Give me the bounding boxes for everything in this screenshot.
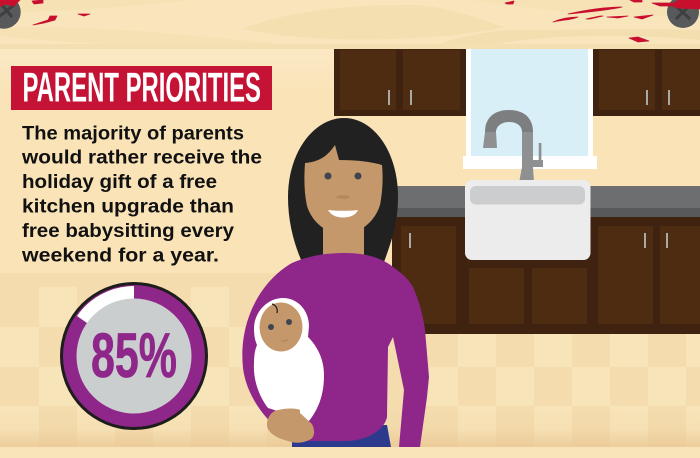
baby face: [260, 302, 302, 352]
woman: [242, 118, 429, 447]
upper left cabinet: [334, 49, 466, 116]
blanket: [254, 298, 324, 421]
countertop: [392, 186, 700, 217]
face: [304, 145, 383, 234]
upper right cabinet: [593, 49, 700, 116]
body text: weekend for a year.: [21, 244, 219, 266]
lower cabinets: [392, 217, 700, 334]
wall: [0, 49, 700, 279]
window: [463, 49, 597, 169]
body text: kitchen upgrade than: [22, 196, 234, 218]
eyes: [324, 172, 332, 180]
progress ring 85%: [60, 282, 208, 430]
sweater: [242, 253, 429, 447]
hair: [288, 118, 398, 262]
title banner: PARENT PRIORITIES: [22, 64, 261, 110]
body text: would rather receive the: [21, 147, 262, 169]
smile: [328, 210, 358, 218]
title banner: [11, 64, 272, 110]
baby: [254, 298, 324, 443]
floor checker tiles: [0, 273, 700, 447]
progress ring 85%: 85%: [91, 321, 177, 391]
left screw: [0, 0, 21, 29]
body text: free babysitting every: [22, 220, 234, 242]
neck: [323, 215, 364, 260]
faucet: [483, 110, 543, 183]
baby mouth: [279, 339, 289, 342]
body text: holiday gift of a free: [22, 171, 217, 193]
sink: [465, 180, 590, 260]
baby eyes: [268, 324, 274, 330]
bottom counter strip: [0, 447, 700, 458]
body text: The majority of parents: [22, 122, 244, 144]
right screw: [667, 0, 699, 28]
jeans: [292, 425, 391, 447]
red ribbon scraps: [0, 0, 700, 42]
wooden table top band: [0, 0, 700, 49]
hand: [267, 408, 314, 443]
baby hair: [272, 304, 277, 313]
nose: [336, 195, 350, 199]
body text: [21, 122, 262, 266]
